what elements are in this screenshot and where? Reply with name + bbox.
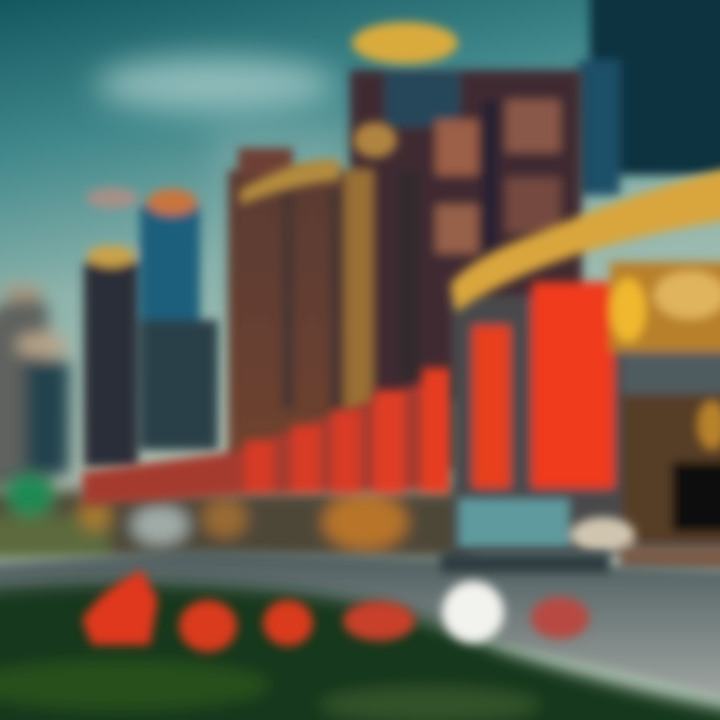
curved golden awning (450, 165, 720, 312)
road (0, 550, 720, 700)
entrance and vehicles (458, 498, 720, 571)
foliage (0, 584, 720, 720)
red ribbon along the base of the tower (82, 368, 452, 505)
gold roof accents (240, 22, 458, 205)
mid towers (84, 187, 218, 467)
cloud (95, 57, 345, 310)
right building with red panels (452, 262, 720, 555)
red flowers and white globe (82, 570, 589, 652)
distant towers: left (0, 284, 69, 490)
dark tower: top right (578, 0, 720, 195)
central brown tower (228, 70, 582, 470)
street-level base (0, 473, 470, 560)
